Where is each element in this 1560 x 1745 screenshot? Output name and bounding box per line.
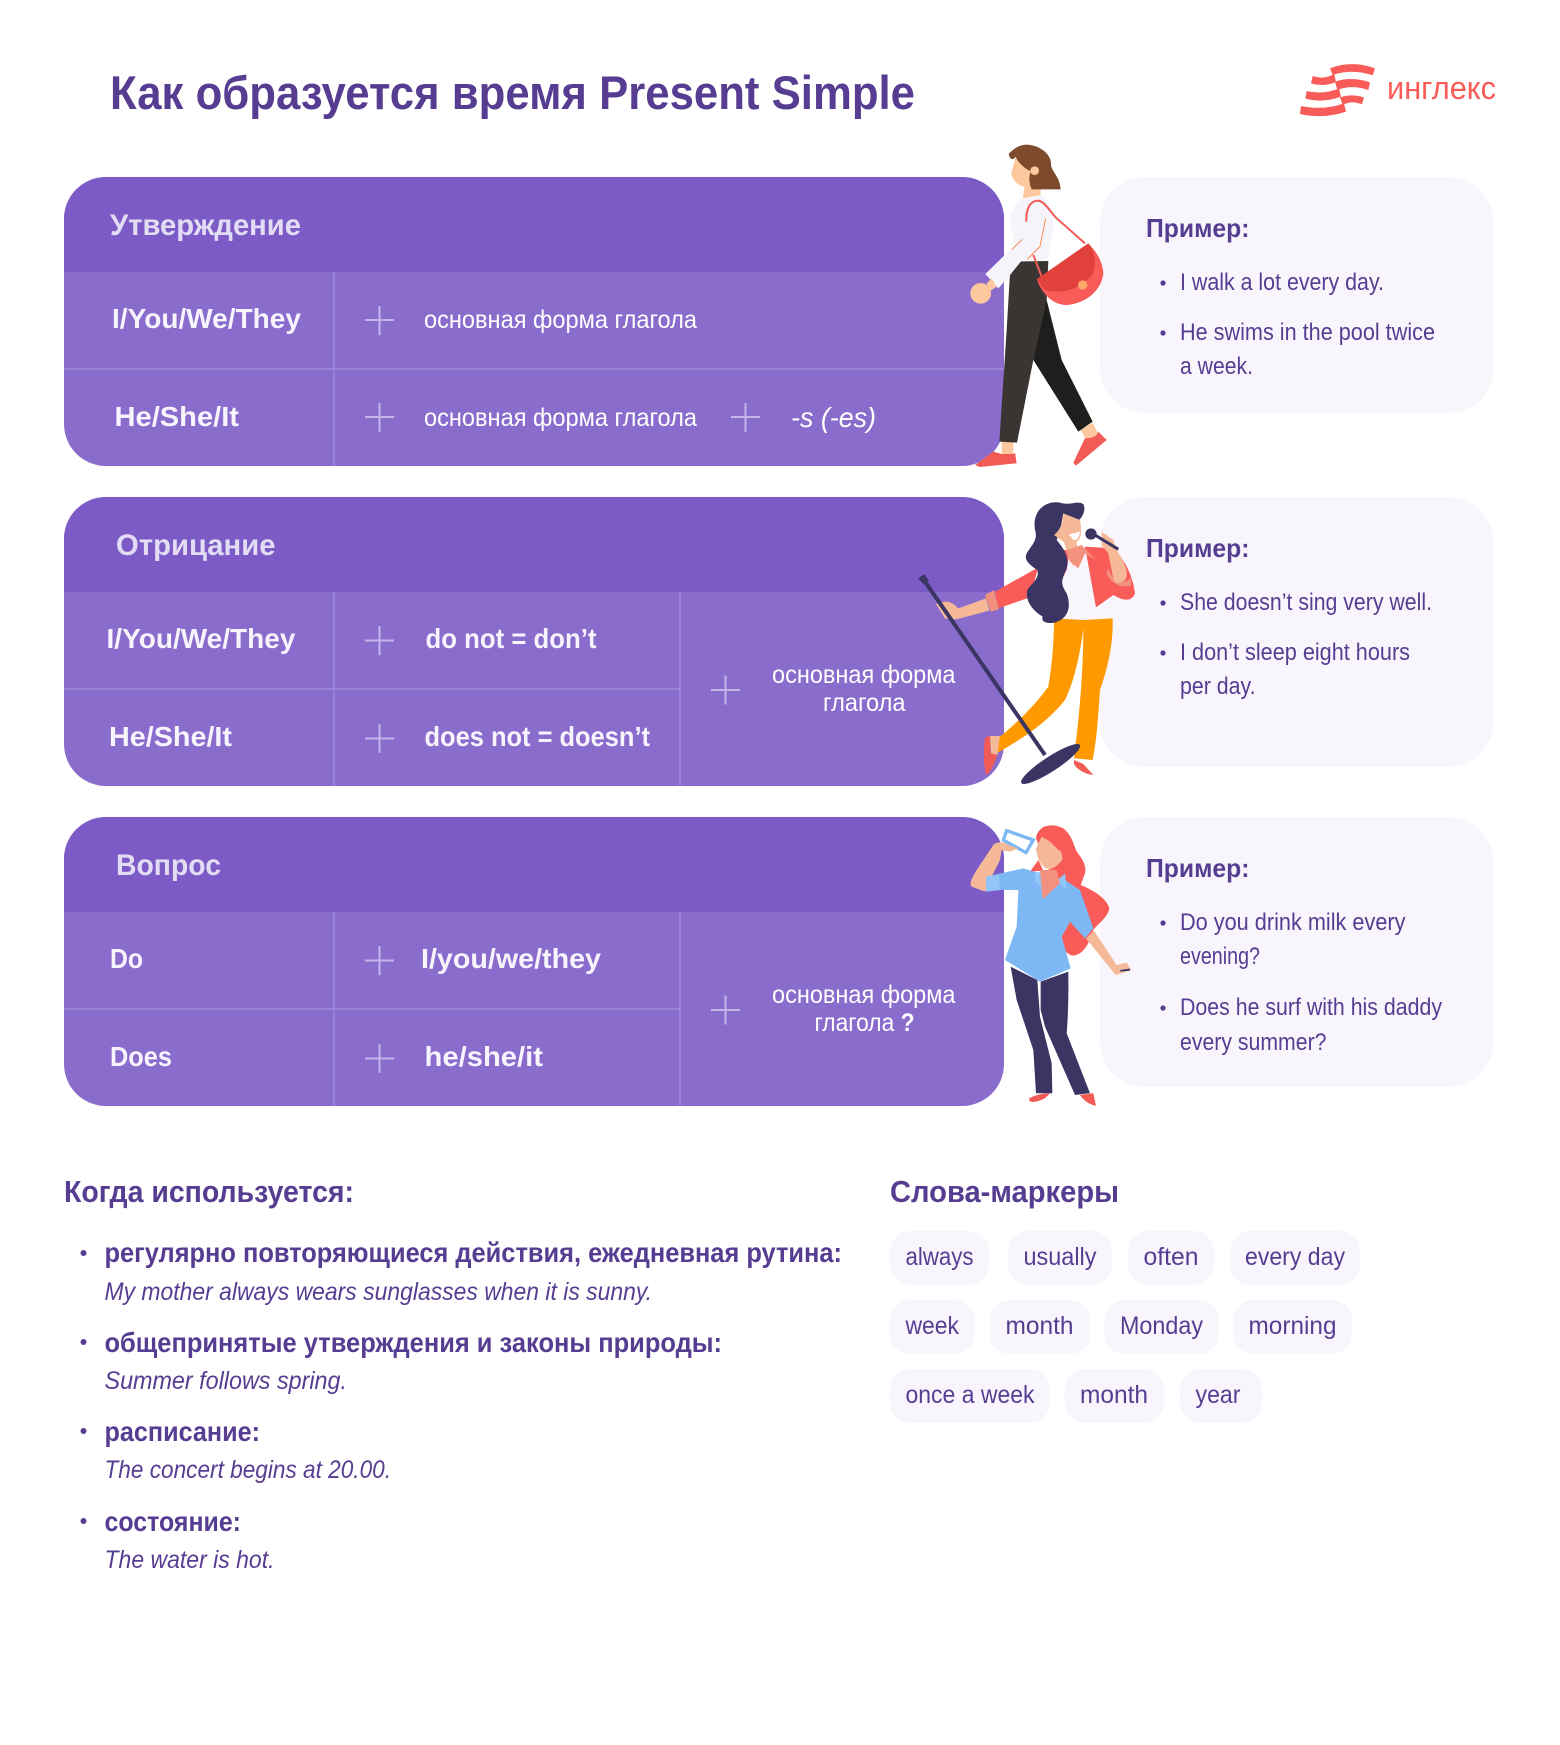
usage item 4: The water is hot.	[104, 1546, 274, 1574]
panel background	[64, 817, 1004, 1106]
heading: marker words: Слова-маркеры	[890, 1174, 1119, 1209]
example heading: Пример:	[1146, 533, 1250, 563]
chips row 1: always	[906, 1243, 974, 1271]
panel background	[64, 497, 1004, 786]
chips row 3: once a week	[906, 1381, 1035, 1409]
chips row 3: year	[1196, 1381, 1240, 1409]
chips row 1: usually	[1024, 1243, 1097, 1271]
row: I/You/We/They: I/You/We/They	[112, 303, 301, 334]
example list: Do you drink milk every	[1180, 909, 1406, 936]
row: He/She/It: does not = doesn’t	[424, 721, 650, 752]
example list: I don’t sleep eight hours	[1180, 639, 1410, 666]
usage item 2	[80, 1327, 722, 1395]
example list	[1160, 589, 1432, 700]
usage item 1	[80, 1237, 842, 1306]
header: affirmative: Утверждение	[110, 209, 301, 242]
usage item 4: состояние:	[104, 1506, 241, 1537]
row: Do: I/you/we/they	[421, 943, 601, 974]
row: Do: Do	[110, 943, 143, 974]
icon: logo waves	[1300, 64, 1375, 116]
usage item 4	[80, 1506, 274, 1574]
usage item 3	[80, 1416, 391, 1484]
section: marker words	[890, 1174, 1360, 1423]
chips row 2: morning	[1248, 1312, 1336, 1340]
row: He/She/It: основная форма глагола	[424, 404, 697, 432]
row: Does	[110, 1041, 543, 1073]
chips row 3: month	[1080, 1381, 1148, 1409]
row: I/You/We/They	[106, 623, 596, 655]
icon: singing woman with microphone stand	[918, 502, 1135, 789]
chips row 2	[890, 1300, 1352, 1354]
header: negative: Отрицание	[116, 529, 276, 562]
chips row 1: often	[1144, 1243, 1198, 1271]
row: He/She/It	[114, 401, 876, 433]
chips row 1	[890, 1231, 1360, 1285]
title: Как образуется время Present Simple	[110, 66, 915, 119]
row: He/She/It: He/She/It	[114, 401, 239, 432]
header: question: Вопрос	[116, 849, 221, 882]
panel header band	[64, 817, 1004, 912]
row: I/You/We/They	[112, 303, 697, 335]
chips row 2: Monday	[1120, 1312, 1203, 1340]
panel background	[64, 177, 1004, 466]
example list: I walk a lot every day.	[1180, 269, 1384, 296]
usage item 1: My mother always wears sunglasses when it is sunny.	[104, 1278, 652, 1306]
example list: She doesn’t sing very well.	[1180, 589, 1432, 616]
card background	[1100, 497, 1493, 767]
example list: every summer?	[1180, 1029, 1326, 1056]
card background	[1100, 817, 1493, 1087]
example list: He swims in the pool twice	[1180, 319, 1435, 346]
row: Does: Does	[110, 1041, 172, 1072]
usage item 3: The concert begins at 20.00.	[104, 1456, 391, 1484]
example heading: Пример:	[1146, 213, 1250, 243]
row: I/You/We/They: I/You/We/They	[106, 623, 296, 654]
row: He/She/It: -s (-es)	[791, 402, 876, 433]
merged cell: base verb with question mark: глагола ?	[814, 1009, 914, 1037]
logo wordmark: инглекс	[1387, 70, 1496, 106]
panel: example 1	[1100, 177, 1493, 413]
usage item 3: расписание:	[104, 1416, 260, 1447]
example list	[1160, 269, 1435, 380]
panel: question	[64, 817, 1004, 1106]
panel: example 2	[1100, 497, 1493, 767]
example list: a week.	[1180, 353, 1253, 380]
example list: per day.	[1180, 673, 1256, 700]
merged cell: base verb: основная форма	[772, 661, 956, 689]
merged cell: base verb with question mark	[711, 981, 956, 1037]
row: Do	[110, 943, 601, 975]
row: He/She/It	[109, 721, 650, 753]
row: Does: he/she/it	[424, 1041, 543, 1072]
usage item 2: Summer follows spring.	[104, 1367, 347, 1395]
usage item 2: общепринятые утверждения и законы природы:	[104, 1327, 722, 1358]
logo: inglex	[1300, 64, 1496, 116]
example list: evening?	[1180, 943, 1260, 970]
merged cell: base verb: глагола	[823, 689, 906, 717]
icon: woman drinking water	[971, 825, 1131, 1106]
heading: when used: Когда используется:	[64, 1174, 354, 1209]
panel: negative	[64, 497, 1004, 786]
chips row 1: every day	[1245, 1243, 1345, 1271]
chips row 3	[890, 1369, 1262, 1423]
card background	[1100, 177, 1493, 413]
example heading: Пример:	[1146, 853, 1250, 883]
panel: affirmative	[64, 177, 1004, 466]
example list: Does he surf with his daddy	[1180, 994, 1443, 1021]
row: I/You/We/They: do not = don’t	[426, 623, 596, 654]
merged cell: base verb	[711, 661, 956, 717]
panel header band	[64, 177, 1004, 272]
section: when used	[64, 1174, 842, 1574]
panel header band	[64, 497, 1004, 592]
chips row 2: month	[1006, 1312, 1074, 1340]
merged cell: base verb with question mark: основная форма	[772, 981, 956, 1009]
usage item 1: регулярно повторяющиеся действия, ежедневная рутина:	[104, 1237, 842, 1268]
row: He/She/It: He/She/It	[109, 721, 232, 752]
row: I/You/We/They: основная форма глагола	[424, 306, 697, 334]
example list	[1160, 909, 1443, 1056]
icon: walking woman with bag	[970, 145, 1107, 467]
chips row 2: week	[905, 1312, 959, 1340]
panel: example 3	[1100, 817, 1493, 1087]
